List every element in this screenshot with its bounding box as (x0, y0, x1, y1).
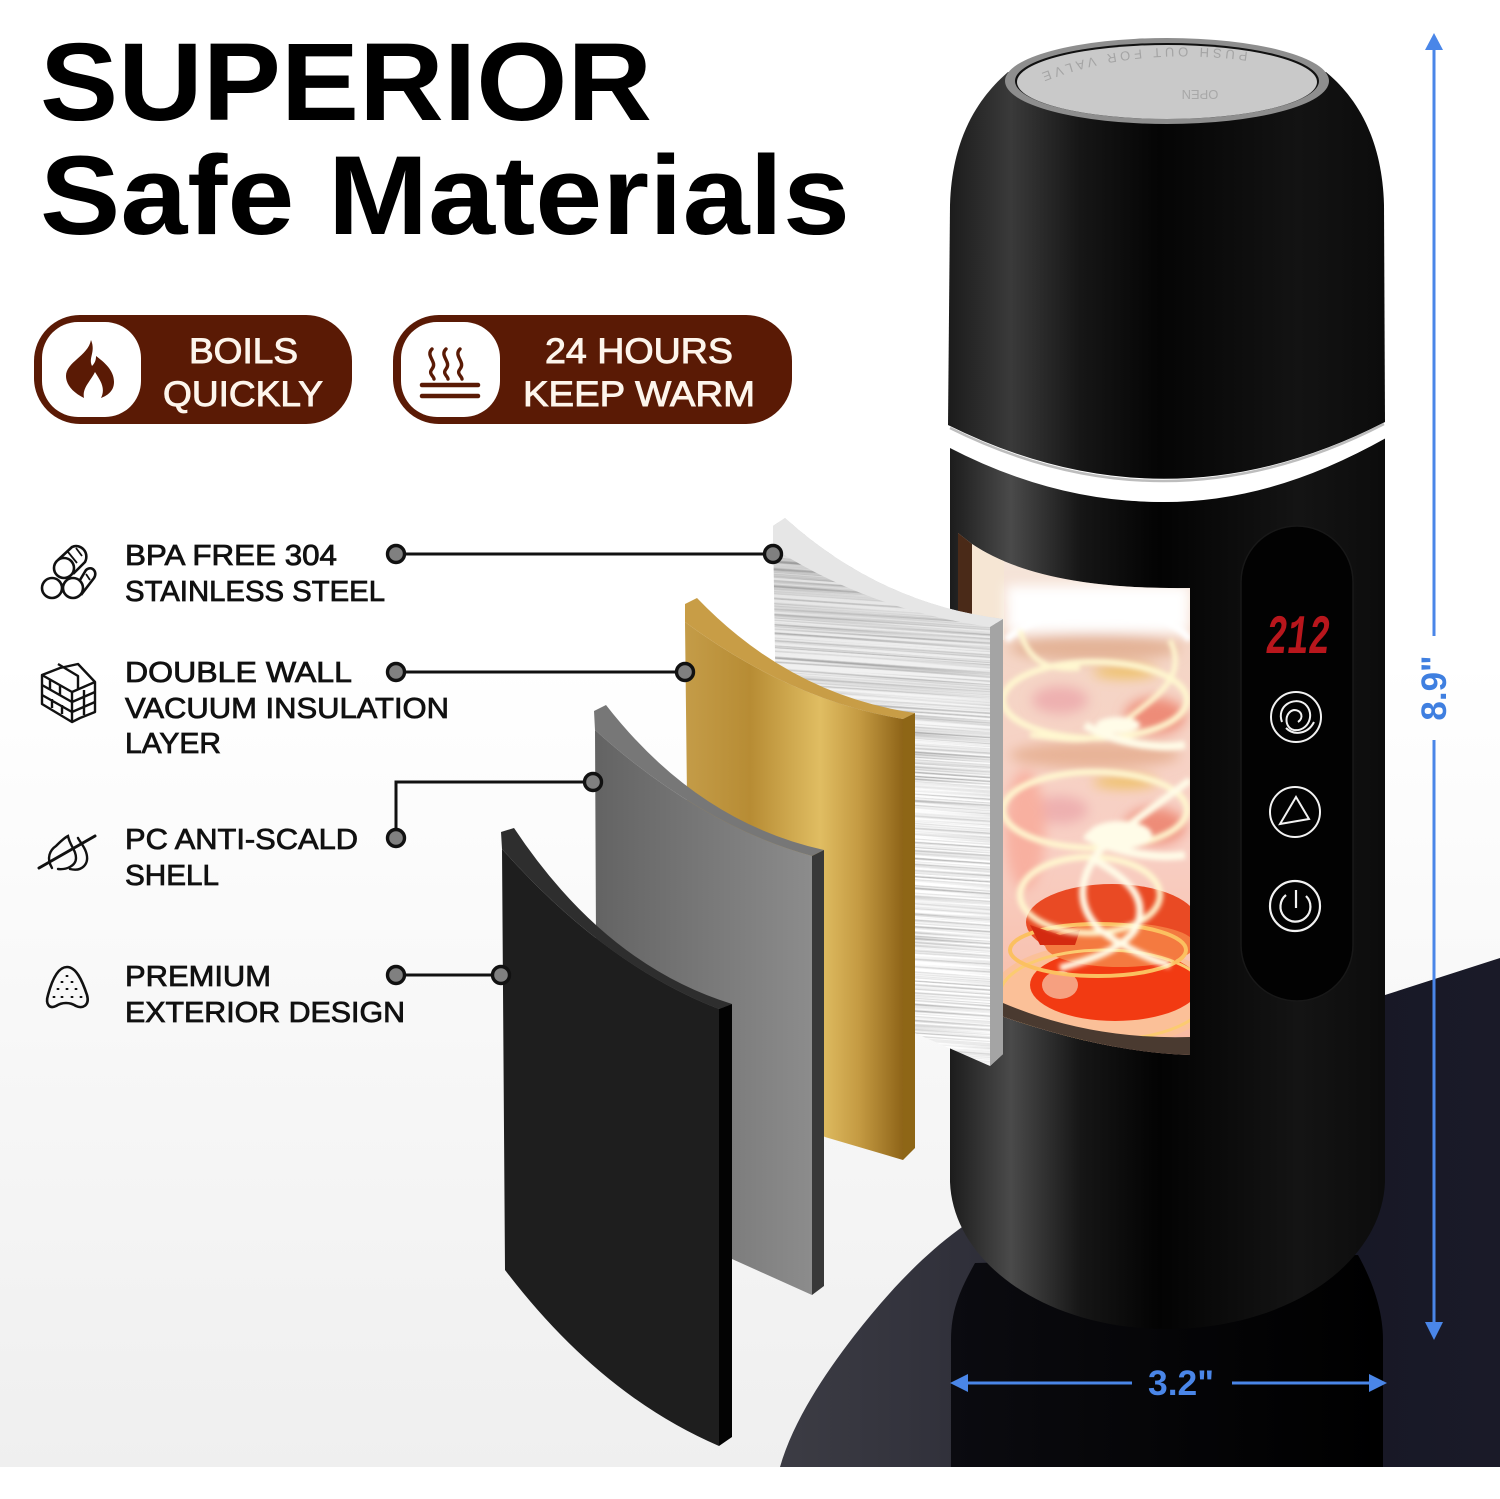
feature: stainless steel: BPA FREE 304 (125, 540, 337, 572)
connector: insulation (388, 664, 694, 680)
feature: anti-scald shell: PC ANTI-SCALD (125, 824, 358, 856)
feature: stainless steel: STAINLESS STEEL (125, 576, 385, 608)
feature: double wall: DOUBLE WALL (125, 657, 352, 689)
dark rim (1003, 1003, 1190, 1060)
title: SUPERIOR (40, 21, 652, 144)
icon: crossed-out flame (39, 836, 95, 870)
dimension: height (1415, 33, 1454, 1340)
bevel (594, 705, 824, 856)
layer: stainless steel (773, 518, 1003, 1066)
feature: double wall: LAYER (125, 728, 221, 760)
feature: double wall (42, 657, 449, 760)
control panel (1241, 526, 1353, 1001)
layer: black exterior (501, 828, 732, 1446)
bottle cap (948, 72, 1385, 479)
feature: double wall: VACUUM INSULATION (125, 693, 449, 725)
bottle body (950, 438, 1385, 1329)
product: kettle bottle (948, 38, 1385, 1324)
lid disc (1005, 38, 1329, 124)
boiling base (1003, 884, 1190, 1047)
badge: 24 hours keep warm (393, 315, 792, 424)
badge: boils quickly (34, 315, 352, 424)
layer: gold vacuum insulation (685, 598, 915, 1160)
layer: gray PC shell (594, 705, 824, 1295)
bevel (501, 828, 732, 1009)
title (40, 21, 850, 258)
icon: steam over plate (422, 349, 478, 396)
icon: bricks (42, 664, 95, 722)
badge: boils quickly: BOILS (189, 332, 298, 371)
heat spirals (1003, 606, 1190, 968)
dimension: width: 3.2" (1148, 1364, 1214, 1403)
lid disc: OPEN (1182, 87, 1218, 102)
badge: boils quickly: QUICKLY (163, 375, 323, 414)
lid disc: PUSH OUT FOR VALVE (1042, 47, 1247, 81)
water blotches (1005, 585, 1190, 890)
window with glowing water (958, 533, 1190, 1055)
feature: premium exterior: EXTERIOR DESIGN (125, 997, 405, 1029)
light ring (948, 415, 1386, 502)
icon: swirl button (1271, 692, 1321, 742)
badge: 24 hours keep warm: 24 HOURS (545, 332, 733, 371)
icon: triangle button (1270, 787, 1320, 837)
icon: logs (42, 546, 95, 598)
dimension: height: 8.9" (1415, 655, 1454, 721)
connector: shell (388, 774, 602, 846)
feature: premium exterior (47, 961, 405, 1029)
dimension: width (950, 1364, 1387, 1403)
connector: steel (388, 546, 782, 562)
bottle reflection (951, 1255, 1383, 1467)
feature: premium exterior: PREMIUM (125, 961, 271, 993)
connector: exterior (388, 966, 510, 984)
icon: dotted iron plate (47, 967, 88, 1007)
bevel (685, 598, 915, 719)
ring shadow (950, 424, 1384, 481)
temperature readout: 212 (1266, 606, 1330, 670)
icon: power button (1270, 881, 1320, 931)
title: Safe Materials (40, 133, 850, 258)
feature: anti-scald shell: SHELL (125, 860, 219, 892)
feature: stainless steel (42, 540, 385, 608)
icon: flame (66, 340, 114, 398)
feature: anti-scald shell (39, 824, 358, 892)
surface: dark rounded table (780, 958, 1500, 1467)
bevel (773, 518, 1003, 627)
badge: 24 hours keep warm: KEEP WARM (523, 375, 755, 414)
